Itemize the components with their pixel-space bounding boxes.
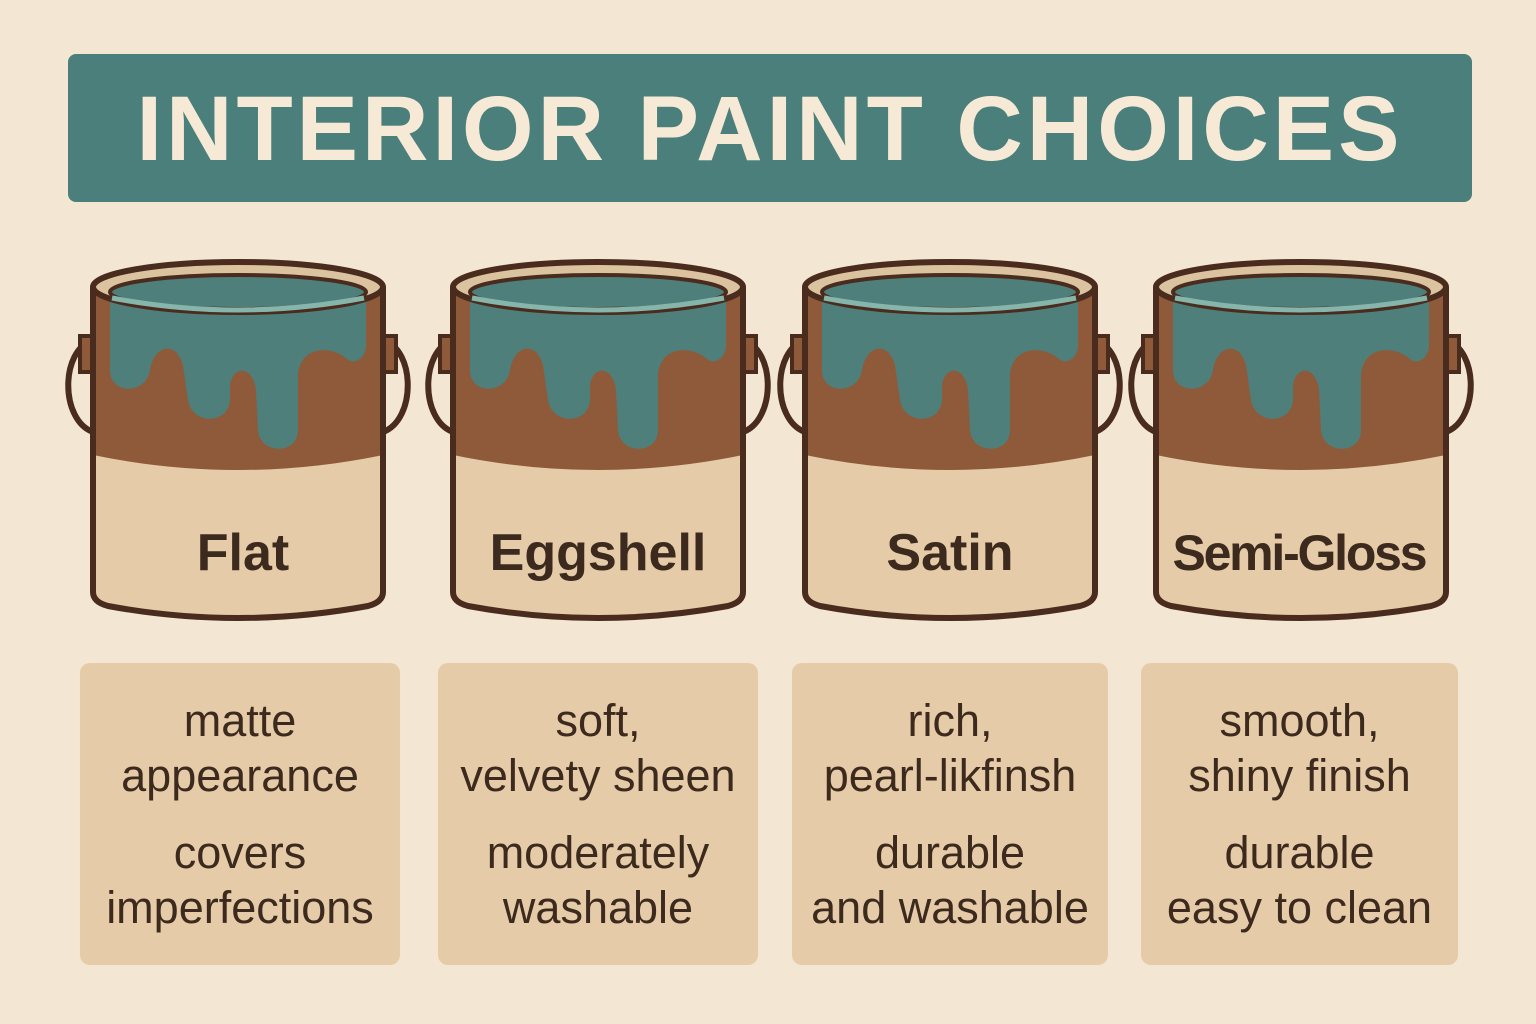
panel: flat description: matte xyxy=(184,695,296,746)
title xyxy=(68,54,1472,202)
panel: eggshell description: moderately xyxy=(487,827,709,878)
panel: satin description: pearl-likfinsh xyxy=(824,750,1076,801)
can: flat xyxy=(68,262,408,618)
can: eggshell: Eggshell xyxy=(490,524,706,582)
can: semi-gloss xyxy=(1131,262,1471,618)
panel: eggshell description: washable xyxy=(503,882,693,933)
panel: satin description: rich, xyxy=(907,695,992,746)
panel: flat description: appearance xyxy=(121,750,359,801)
can: semi-gloss: Semi-Gloss xyxy=(1172,525,1428,581)
panel: satin description: and washable xyxy=(811,882,1089,933)
can: satin: Satin xyxy=(886,524,1014,582)
panel: eggshell description xyxy=(438,663,758,965)
can: eggshell xyxy=(428,262,768,618)
panel: semi-gloss description: shiny finish xyxy=(1188,750,1411,801)
panel: flat description: imperfections xyxy=(106,882,374,933)
panel: flat description: covers xyxy=(174,827,306,878)
panel: flat description xyxy=(80,663,400,965)
panel: semi-gloss description: smooth, xyxy=(1219,695,1380,746)
panel: semi-gloss description xyxy=(1141,663,1458,965)
panel: satin description: durable xyxy=(875,827,1025,878)
panel: eggshell description: velvety sheen xyxy=(460,750,736,801)
panel: semi-gloss description: easy to clean xyxy=(1167,882,1432,933)
can: flat: Flat xyxy=(197,524,289,582)
panel: eggshell description: soft, xyxy=(555,695,641,746)
panel: semi-gloss description: durable xyxy=(1224,827,1375,878)
can: satin xyxy=(780,262,1120,618)
panel: satin description xyxy=(792,663,1108,965)
title: INTERIOR PAINT CHOICES xyxy=(136,78,1404,180)
